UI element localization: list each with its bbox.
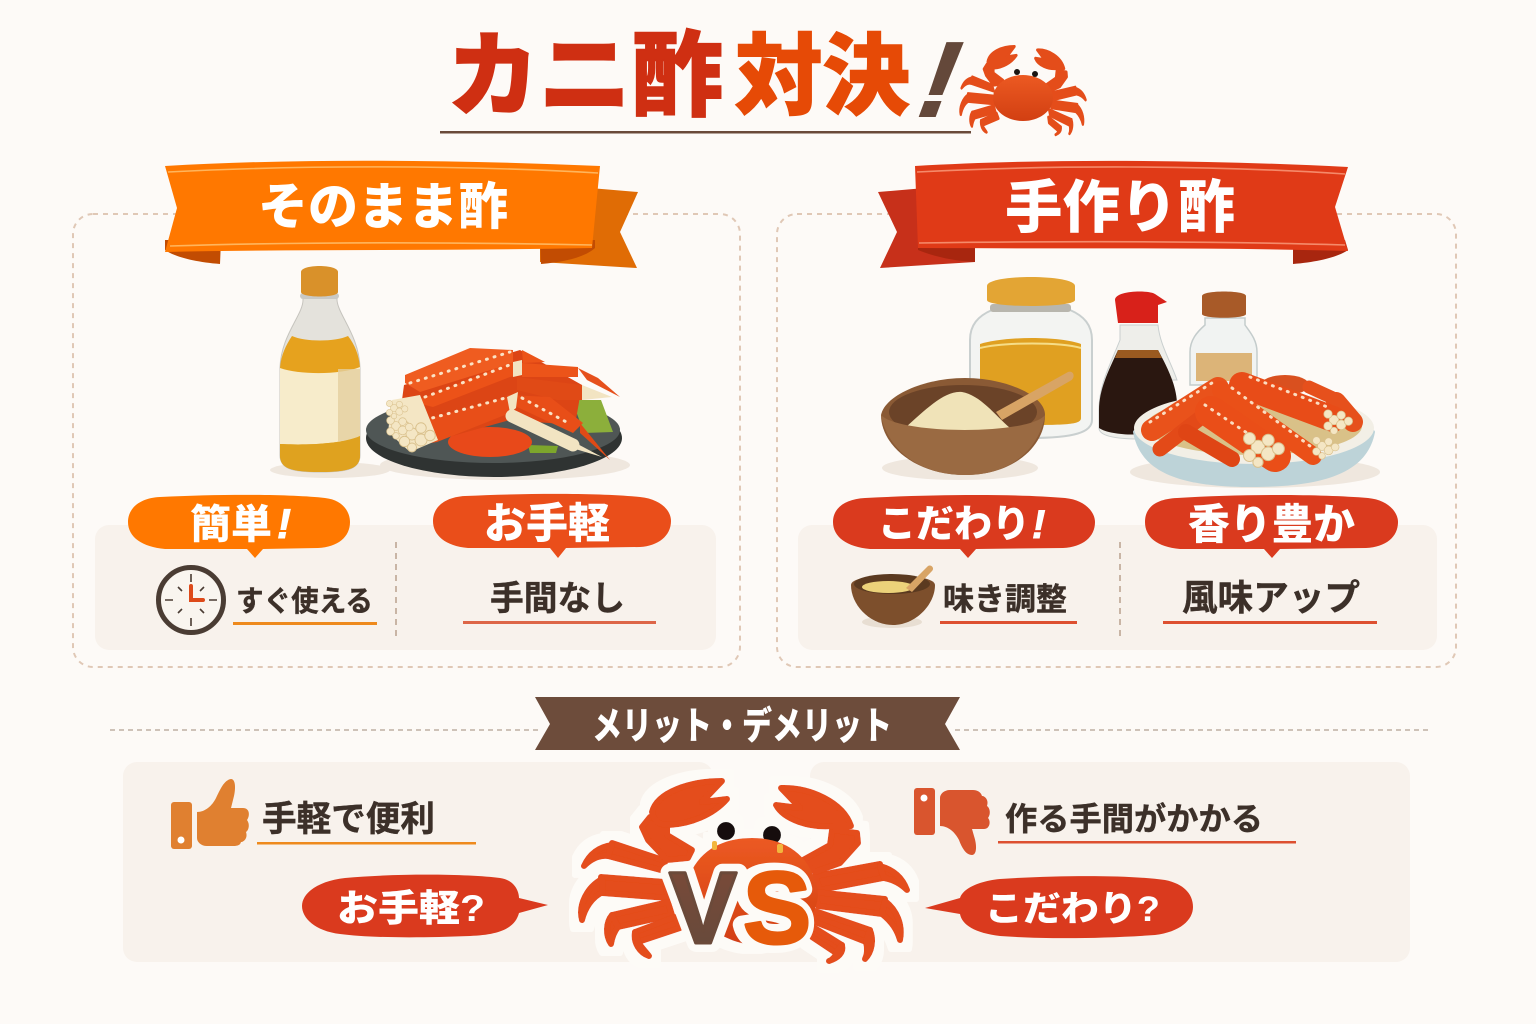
VS lettering: V bbox=[669, 851, 737, 965]
panel: ready-made vinegar bbox=[73, 161, 740, 667]
label: 手間なし bbox=[463, 580, 656, 624]
heading ribbon: メリット・デメリット: メリット・デメリット bbox=[592, 705, 892, 748]
badge: お手軽 bbox=[433, 494, 671, 558]
banner: そのまま酢 bbox=[165, 161, 638, 268]
badge: こだわり!: ! bbox=[1032, 503, 1045, 547]
label: すぐ使える: すぐ使える bbox=[236, 585, 373, 618]
label: 手間なし: 手間なし bbox=[490, 580, 625, 618]
section divider lines bbox=[110, 729, 1432, 731]
banner: そのまま酢: そのまま酢 bbox=[258, 179, 508, 235]
title: ! bbox=[912, 20, 968, 139]
label: 手軽で便利: 手軽で便利 bbox=[262, 800, 435, 839]
title bbox=[440, 20, 971, 139]
banner: 手作り酢: 手作り酢 bbox=[1005, 176, 1235, 240]
callout: こだわり? bbox=[925, 876, 1193, 938]
heading ribbon: メリット・デメリット bbox=[535, 697, 960, 750]
illustration: jar, soy sauce, bowl and crab plate bbox=[881, 277, 1380, 488]
panel: homemade vinegar bbox=[777, 161, 1456, 667]
VS lettering: VS bbox=[669, 851, 809, 965]
callout: お手軽?: お手軽? bbox=[337, 888, 485, 929]
icon: thumbs down bbox=[914, 788, 990, 855]
icon: large crab with VS bbox=[581, 781, 907, 965]
badge: こだわり! bbox=[833, 495, 1095, 558]
title: カニ酢 bbox=[447, 26, 723, 128]
VS lettering: S bbox=[743, 851, 811, 965]
badge: 香り豊か bbox=[1145, 495, 1398, 558]
label: 作る手間がかかる: 作る手間がかかる bbox=[1005, 801, 1263, 837]
icon: small red crab beside title bbox=[960, 46, 1086, 135]
badge: 簡単!: 簡単 bbox=[190, 503, 272, 547]
icon: small sauce bowl bbox=[851, 565, 935, 628]
badge: 簡単!: ! bbox=[277, 500, 291, 547]
callout: こだわり?: こだわり? bbox=[985, 890, 1160, 929]
badge: 香り豊か: 香り豊か bbox=[1188, 501, 1355, 548]
banner: 手作り酢 bbox=[878, 161, 1348, 268]
label: 風味アップ: 風味アップ bbox=[1182, 577, 1360, 618]
illustration: vinegar bottle and crab plate bbox=[270, 266, 630, 480]
icon: clock bbox=[158, 568, 224, 632]
label: 味き調整: 味き調整 bbox=[943, 582, 1067, 617]
panel: merits and demerits comparison bbox=[123, 762, 1410, 962]
callout: お手軽? bbox=[302, 875, 548, 937]
title: 対決 bbox=[735, 27, 910, 126]
badge: こだわり!: こだわり bbox=[878, 504, 1030, 546]
badge: 簡単! bbox=[128, 495, 350, 558]
icon: thumbs up bbox=[171, 779, 249, 849]
badge: お手軽: お手軽 bbox=[484, 500, 610, 547]
